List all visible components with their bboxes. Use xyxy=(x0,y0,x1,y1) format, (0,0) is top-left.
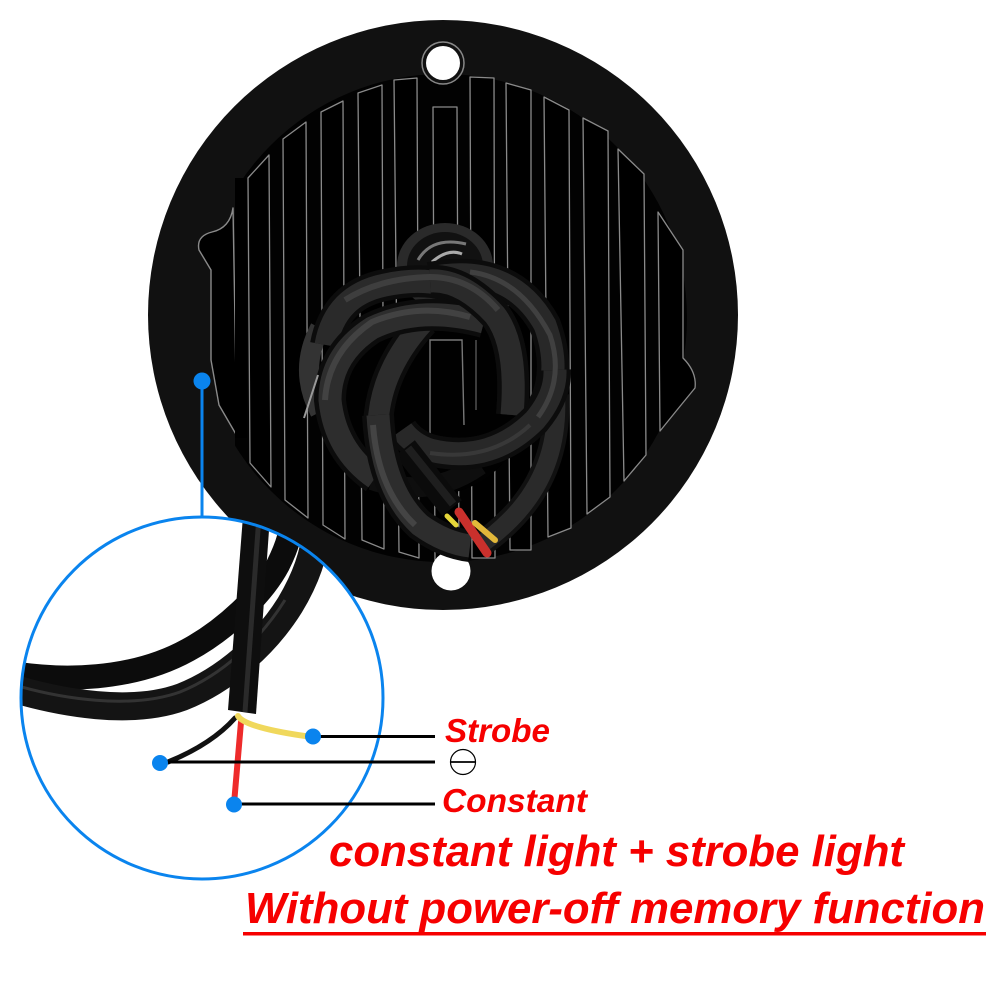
strand A top xyxy=(326,281,513,415)
callout leader dot xyxy=(194,372,210,390)
icon: negative symbol xyxy=(450,750,476,774)
inset cables xyxy=(18,515,318,714)
inset magnifier circle xyxy=(22,521,348,798)
label leader: constant xyxy=(226,796,435,812)
strand E lower right xyxy=(480,395,556,545)
inset circle outline xyxy=(21,517,383,879)
label leader: negative xyxy=(152,755,435,771)
knot interior shadow xyxy=(337,305,527,495)
lower back strand xyxy=(372,465,480,487)
left dark patch xyxy=(235,178,247,438)
heading line 1: constant light + strobe light xyxy=(329,827,906,876)
strand B right ring xyxy=(402,275,553,454)
cut wire ends xyxy=(447,512,495,553)
label: Constant: Constant xyxy=(442,782,589,819)
strand F cut end xyxy=(405,448,452,508)
strand D upper xyxy=(378,322,424,425)
strand G back left xyxy=(309,328,320,412)
strand C inner swirl xyxy=(330,315,484,478)
strand B lower redraw xyxy=(402,370,555,454)
heading line 2: Without power-off memory function xyxy=(245,884,985,933)
rubber grommet xyxy=(397,223,493,309)
shield drain wire xyxy=(304,375,318,418)
left notch xyxy=(199,208,237,436)
callout leader line xyxy=(200,381,204,517)
label leader: strobe xyxy=(305,728,435,744)
strand A right redraw xyxy=(430,281,513,415)
strand D lower xyxy=(378,415,470,546)
top mounting hole xyxy=(422,42,464,84)
bottom mounting hole xyxy=(432,552,470,590)
product: round black light back plate xyxy=(148,20,738,610)
heading underline xyxy=(243,932,986,936)
inset wires xyxy=(168,716,312,804)
coiled cable xyxy=(304,272,556,546)
label: Strobe: Strobe xyxy=(445,712,550,749)
grille recess xyxy=(199,74,687,562)
grille slots xyxy=(248,77,695,560)
